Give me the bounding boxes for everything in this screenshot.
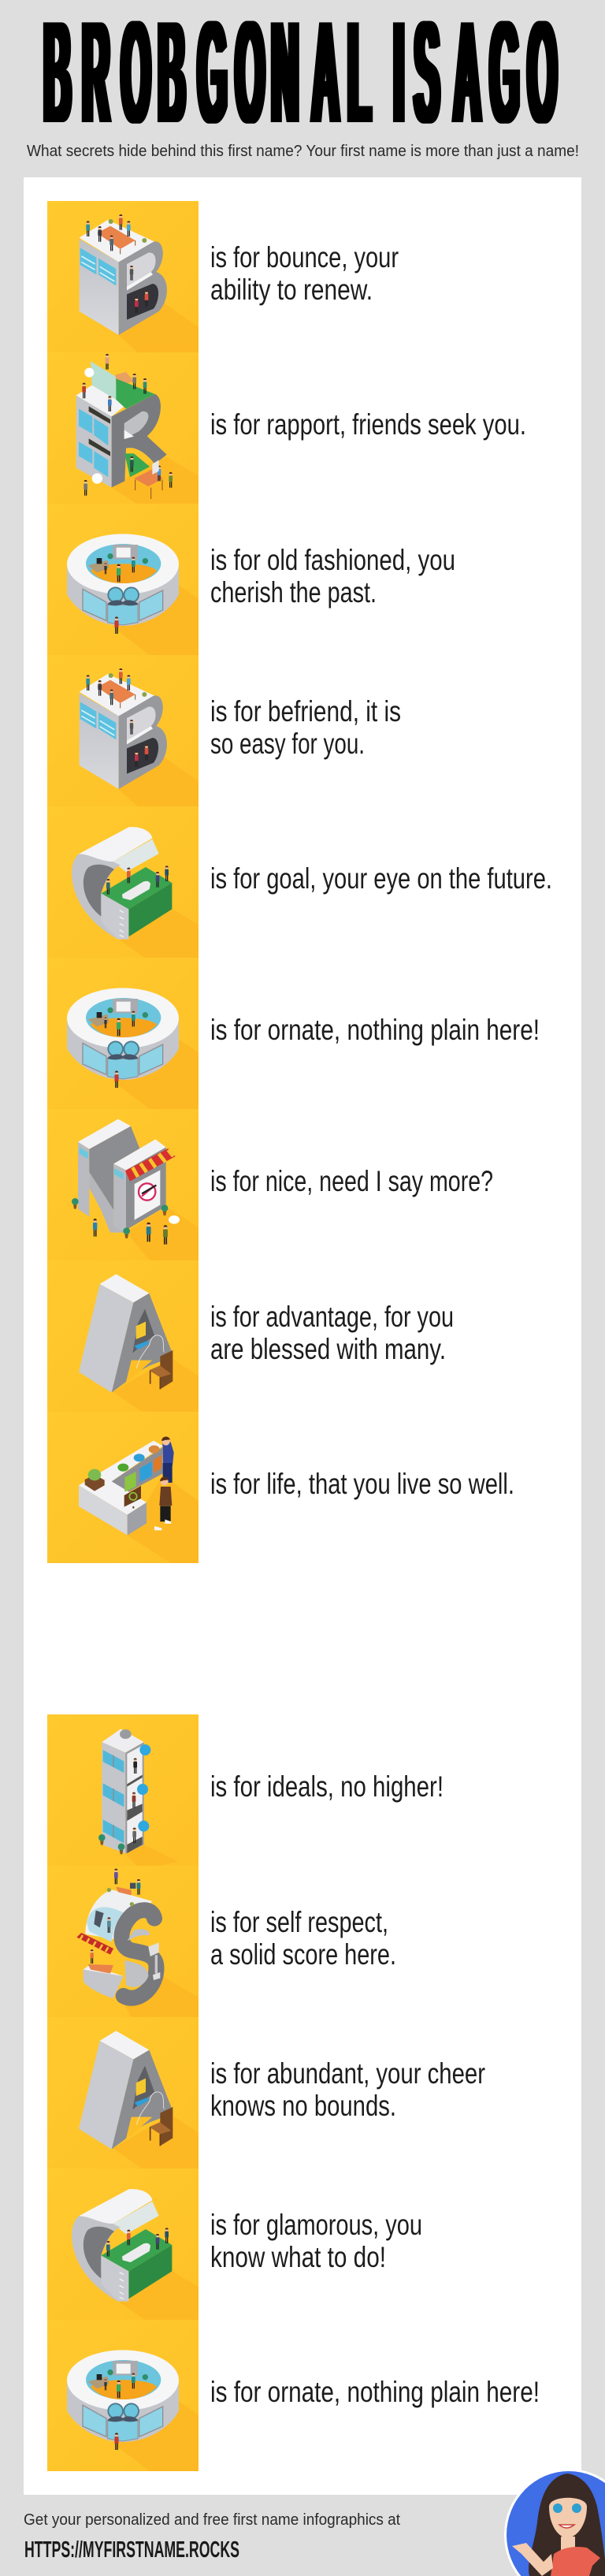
row: O is for ornate (second) xyxy=(47,2320,540,2471)
row: G is for glamorous: is for glamorous, you xyxy=(210,2209,422,2241)
row: O is for ornate xyxy=(47,958,540,1109)
row: I is for ideals xyxy=(47,1714,444,1866)
row: B is for befriend: is for befriend, it is xyxy=(210,695,401,728)
row: B is for befriend xyxy=(47,655,401,806)
row: A is for abundant: knows no bounds. xyxy=(210,2090,396,2122)
icon: avatar xyxy=(504,2469,605,2576)
row: R is for rapport xyxy=(47,352,526,504)
row: N is for nice: is for nice, need I say more? xyxy=(210,1165,493,1197)
row: L is for life xyxy=(47,1412,514,1563)
row: S is for self respect: is for self respect, xyxy=(210,1906,388,1938)
row: I is for ideals: is for ideals, no higher! xyxy=(210,1770,444,1803)
row: B is for bounce: is for bounce, your xyxy=(210,241,399,274)
row: S is for self respect: a solid score here. xyxy=(210,1938,396,1971)
row: O is for old fashioned: is for old fashioned, you xyxy=(210,544,455,576)
footer url: HTTPS://MYFIRSTNAME.ROCKS xyxy=(24,2537,239,2563)
row: G is for glamorous: know what to do! xyxy=(210,2241,386,2273)
subtitle: What secrets hide behind this first name? Your first name is more than just a name! xyxy=(27,143,579,160)
row: A is for advantage xyxy=(47,1260,454,1412)
row: B is for befriend: so easy for you. xyxy=(210,728,365,760)
row: B is for bounce: ability to renew. xyxy=(210,274,373,306)
row: A is for abundant xyxy=(47,2017,485,2168)
row: A is for advantage: is for advantage, for you xyxy=(210,1301,454,1333)
row: A is for advantage: are blessed with many. xyxy=(210,1333,446,1365)
row: G is for glamorous xyxy=(47,2168,422,2320)
footer text: Get your personalized and free first name infographics at xyxy=(24,2511,400,2529)
row: B is for bounce xyxy=(47,201,399,352)
row: R is for rapport: is for rapport, friends seek you. xyxy=(210,408,526,441)
row: O is for old fashioned xyxy=(47,504,455,655)
row: G is for goal xyxy=(47,806,552,958)
row: A is for abundant: is for abundant, your cheer xyxy=(210,2057,485,2090)
row: N is for nice xyxy=(47,1109,493,1260)
row: O is for old fashioned: cherish the past. xyxy=(210,576,377,609)
row: L is for life: is for life, that you live so well. xyxy=(210,1468,514,1500)
row: S is for self respect xyxy=(47,1866,396,2017)
